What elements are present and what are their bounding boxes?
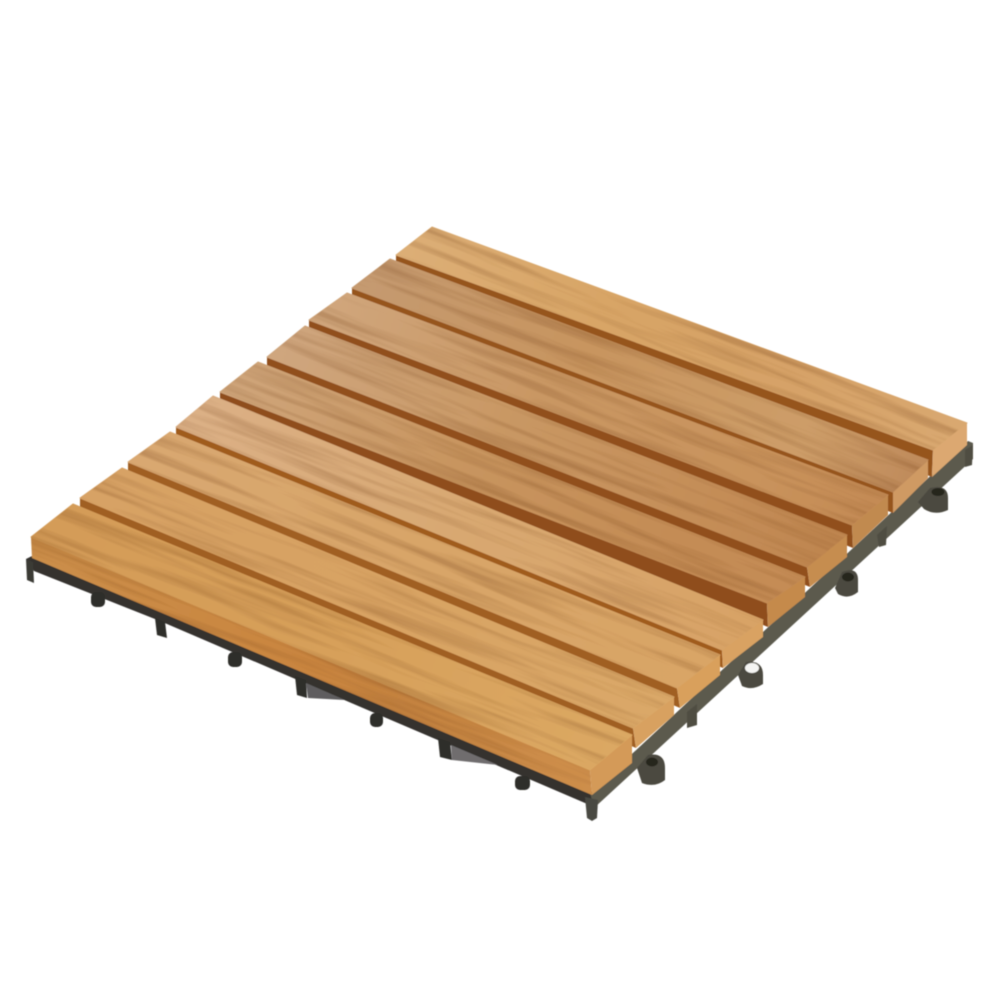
left corner clip (26, 559, 34, 583)
corner foot (585, 797, 598, 821)
mesh under front rail (306, 683, 345, 700)
slat 8 (80, 468, 674, 748)
connector ring 4 (918, 487, 948, 513)
front rail (26, 556, 594, 806)
front feet (91, 592, 530, 790)
slat 7 (128, 432, 720, 708)
slat 1 (396, 227, 967, 477)
slat 5 (220, 362, 805, 627)
slat 4 (267, 326, 847, 587)
tile assembly (25, 226, 974, 822)
slat 3 (309, 293, 888, 548)
slat 2 (352, 259, 928, 513)
slat 6 (176, 396, 763, 668)
product illustration: teak deck tile (25, 226, 974, 822)
wood grain overlay (31, 228, 958, 770)
plastic base frame (26, 441, 973, 821)
small clips on right rail (687, 445, 973, 728)
connector ring 3 (835, 570, 858, 597)
connector ring 1 (637, 755, 665, 785)
connector ring 2 (738, 662, 763, 688)
slat 9 (31, 504, 632, 795)
right rail (590, 441, 973, 808)
